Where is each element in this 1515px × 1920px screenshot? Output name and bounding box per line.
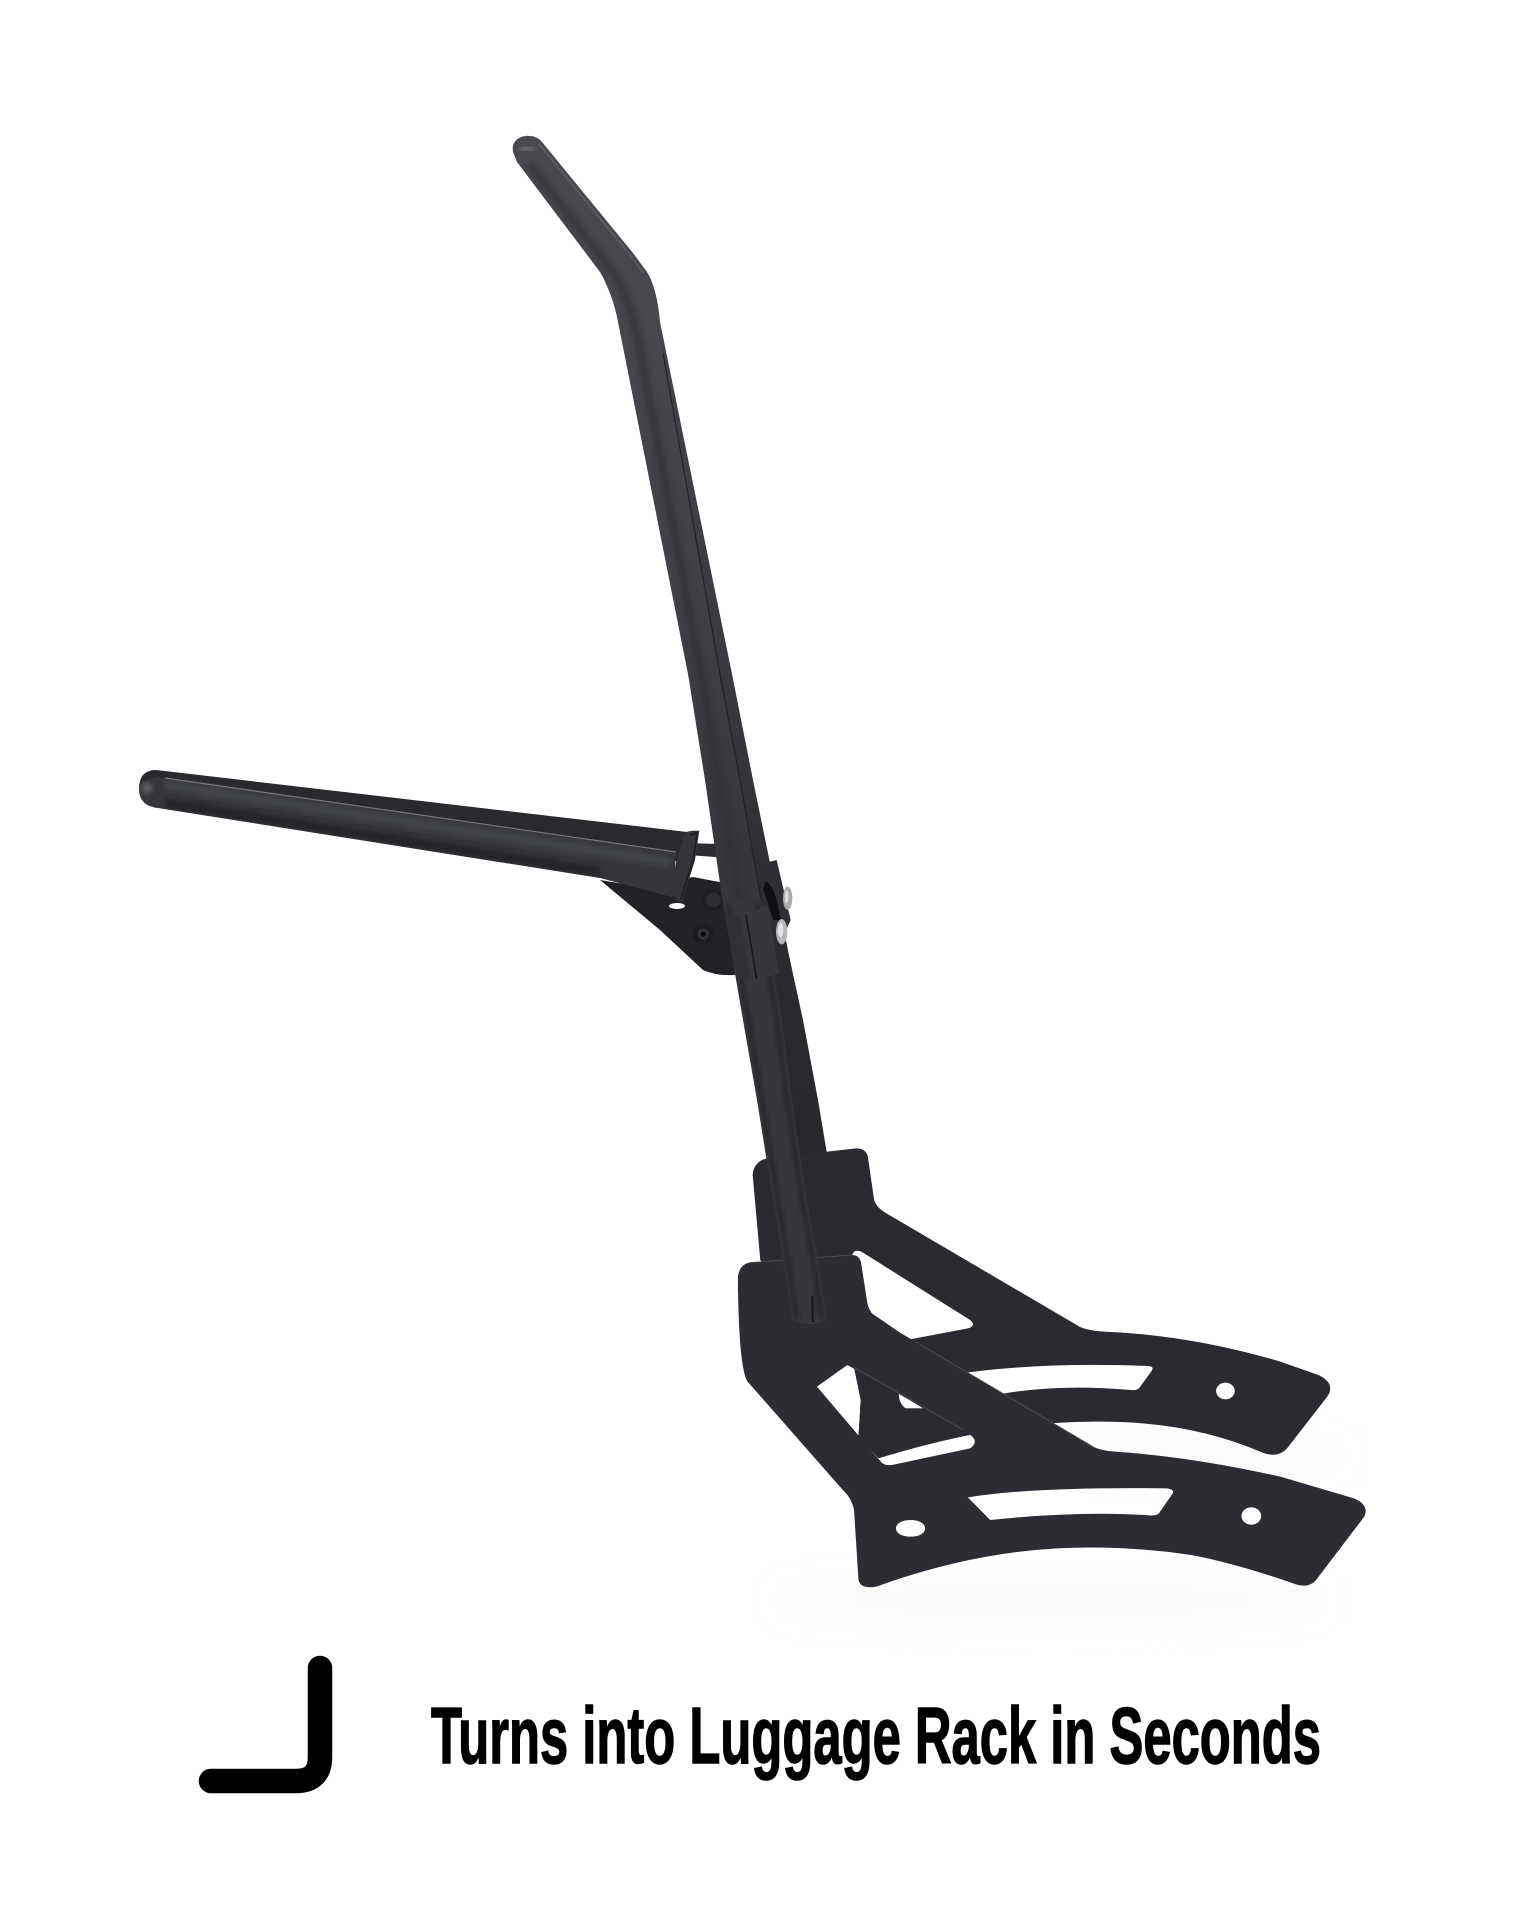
rear footplate	[753, 1148, 1330, 1458]
folded luggage arm	[139, 770, 687, 897]
front plate edge highlights	[749, 1255, 1093, 1447]
infographic canvas	[139, 136, 1366, 1794]
icon: L-shaped luggage rack profile	[211, 1668, 320, 1781]
floor shadow	[780, 1443, 1340, 1618]
front footplate	[738, 1255, 1366, 1587]
rear plate seen through the front cut-out	[854, 1367, 963, 1457]
gusset bracket behind the arm	[600, 877, 735, 975]
rear upright tube	[640, 265, 828, 1160]
front upright tube	[513, 136, 827, 1324]
arm pivot bracket and hinge bolts	[670, 831, 727, 948]
front clamp	[725, 904, 779, 982]
rear clamp with silver bolts	[757, 860, 792, 944]
artwork layer	[139, 136, 1366, 1794]
